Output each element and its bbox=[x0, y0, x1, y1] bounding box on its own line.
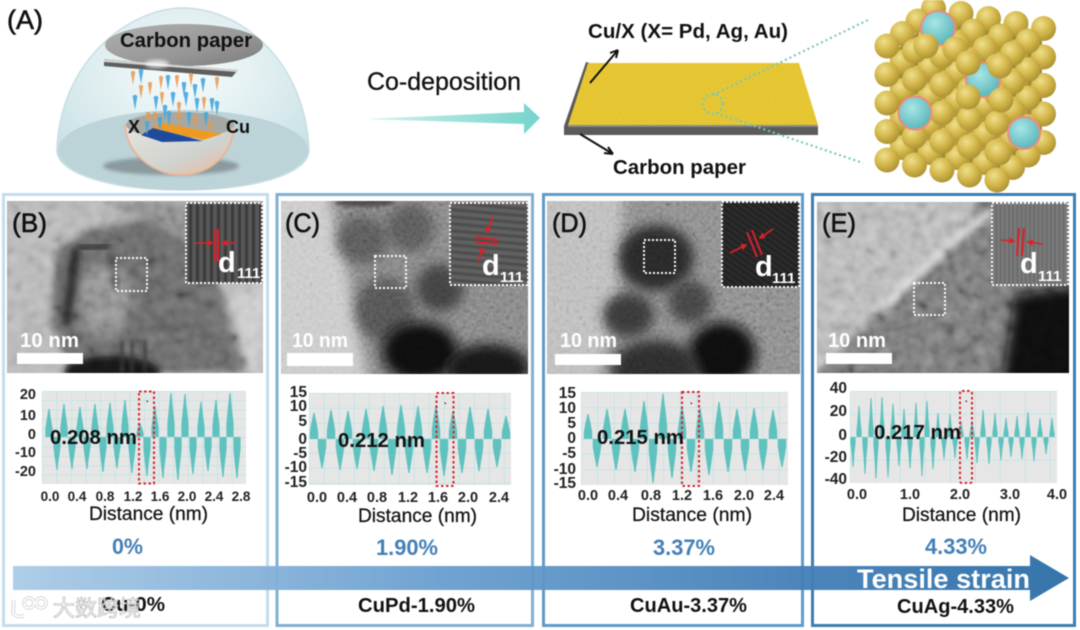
label: carbon paper: Carbon paper bbox=[613, 157, 746, 179]
line profile chart D: 0.0 bbox=[578, 488, 598, 504]
line profile chart C: 1.6 bbox=[428, 490, 448, 506]
icon: sputtering dome chamber bbox=[57, 8, 309, 190]
panel border bbox=[4, 194, 268, 626]
panel B: Cu bbox=[4, 194, 268, 626]
line profile chart D: 0.215 nm bbox=[597, 427, 684, 449]
scale bar C bbox=[287, 330, 353, 366]
icon: coated carbon paper sheet bbox=[564, 60, 821, 135]
inset E: lattice fringes: d bbox=[1020, 248, 1038, 280]
inset B: lattice fringes bbox=[186, 203, 262, 283]
line profile chart D: 0.4 bbox=[608, 488, 628, 504]
panel border bbox=[812, 194, 1074, 626]
line profile chart B: 10 bbox=[20, 408, 36, 424]
line profile chart D: -10 bbox=[554, 461, 576, 478]
inset B: lattice fringes: d bbox=[218, 247, 236, 279]
line profile chart C: 2.4 bbox=[489, 490, 509, 506]
arrow: to coating bbox=[590, 50, 618, 83]
line profile chart B: Distance (nm) bbox=[89, 504, 208, 525]
text: co-deposition: Co-deposition bbox=[367, 68, 521, 96]
panel label A: (A) bbox=[7, 5, 43, 35]
line profile chart D: -5 bbox=[562, 445, 576, 462]
line profile chart D: 1.6 bbox=[703, 488, 723, 504]
panel A: co-deposition schematic bbox=[7, 0, 1056, 192]
line profile chart C: 2.0 bbox=[458, 490, 478, 506]
line profile chart C: -5 bbox=[293, 445, 307, 462]
scale bar D: 10 nm bbox=[560, 330, 617, 352]
inset C: lattice fringes bbox=[450, 203, 528, 286]
line profile chart D: 0.8 bbox=[641, 488, 661, 504]
sample label E: CuAg-4.33% bbox=[897, 596, 1014, 618]
sample label B: Cu-0% bbox=[101, 594, 165, 616]
line profile chart B: 1.6 bbox=[151, 489, 170, 504]
panel border bbox=[544, 194, 802, 626]
line profile chart E: -40 bbox=[825, 471, 847, 488]
line profile chart E: 20 bbox=[830, 403, 847, 420]
line profile chart D: 1.2 bbox=[672, 488, 692, 504]
panel label C: (C) bbox=[285, 208, 320, 238]
scale bar B: 10 nm bbox=[20, 330, 79, 352]
strain value C: 1.90% bbox=[376, 535, 438, 560]
line profile chart C: 0.212 nm bbox=[338, 430, 425, 452]
inset B: lattice fringes: 111 bbox=[237, 265, 260, 282]
line profile chart E: 0 bbox=[838, 427, 847, 444]
line profile chart B: -20 bbox=[15, 464, 36, 480]
line profile chart E: 4.0 bbox=[1047, 487, 1067, 503]
line profile chart D: 2.0 bbox=[734, 488, 754, 504]
strain value E: 4.33% bbox=[925, 534, 987, 559]
selected region E bbox=[914, 283, 945, 315]
sample label D: CuAu-3.37% bbox=[630, 595, 747, 617]
inset D: lattice fringes: 111 bbox=[772, 270, 795, 287]
selected region D bbox=[644, 240, 675, 273]
line profile chart D bbox=[554, 385, 788, 526]
line profile chart C: 1.2 bbox=[398, 490, 418, 506]
line profile chart C: 15 bbox=[290, 384, 307, 401]
zoom callout: dotted lines bbox=[703, 19, 870, 163]
micrograph B bbox=[7, 201, 263, 388]
micrograph D bbox=[546, 200, 801, 375]
line profile chart E: 0.0 bbox=[847, 487, 867, 503]
inset E: lattice fringes: 111 bbox=[1038, 268, 1061, 285]
line profile chart B: 2.8 bbox=[232, 489, 251, 504]
inset C: lattice fringes: d bbox=[482, 250, 500, 282]
line profile chart B: 0.8 bbox=[96, 489, 115, 504]
line profile chart D: 15 bbox=[559, 385, 576, 402]
line profile chart B: 1.2 bbox=[124, 489, 142, 504]
selected region B bbox=[116, 258, 147, 291]
line profile chart B: 20 bbox=[20, 387, 36, 403]
line profile chart C: Distance (nm) bbox=[358, 506, 477, 527]
label: Cu/X composition: Cu/X (X= Pd, Ag, Au) bbox=[588, 21, 788, 43]
inset D: lattice fringes: d bbox=[755, 251, 773, 283]
label: tensile strain: Tensile strain bbox=[857, 564, 1030, 594]
line profile chart C: 0 bbox=[298, 431, 307, 448]
scale bar E bbox=[826, 330, 892, 364]
line profile chart C: 0.0 bbox=[307, 490, 327, 506]
line profile chart B: 0.4 bbox=[68, 489, 87, 504]
line profile chart B: 2.0 bbox=[178, 489, 196, 504]
arrow: co-deposition bbox=[365, 103, 540, 134]
line profile chart E: 1.0 bbox=[900, 487, 920, 503]
line profile chart E: 40 bbox=[830, 380, 847, 397]
line profile chart C bbox=[285, 384, 511, 527]
line profile chart E: -20 bbox=[825, 449, 847, 466]
line profile chart D: 5 bbox=[567, 415, 576, 432]
line profile chart C: -15 bbox=[285, 474, 307, 491]
dome label: Cu: Cu bbox=[226, 117, 250, 137]
line profile chart E: 2.0 bbox=[950, 487, 970, 503]
line profile chart D: -15 bbox=[554, 475, 576, 492]
line profile chart C: -10 bbox=[285, 459, 307, 476]
strain value D: 3.37% bbox=[653, 535, 715, 560]
scale bar B bbox=[17, 330, 83, 364]
micrograph C bbox=[280, 200, 529, 375]
selected region C bbox=[375, 256, 406, 288]
inset E: lattice fringes bbox=[992, 203, 1068, 285]
line profile chart D: 10 bbox=[559, 400, 576, 417]
dome label: X: X bbox=[128, 117, 140, 137]
icon: atomic cube model bbox=[874, 0, 1056, 192]
arrow: to carbon paper bbox=[580, 134, 613, 154]
scale bar C: 10 nm bbox=[292, 330, 348, 352]
inset D: lattice fringes bbox=[722, 202, 799, 287]
scale bar E: 10 nm bbox=[828, 330, 886, 352]
panel D: CuAu bbox=[541, 192, 805, 628]
watermark bbox=[13, 596, 141, 621]
panel label B: (B) bbox=[12, 208, 47, 238]
line profile chart C: 0.4 bbox=[337, 490, 357, 506]
line profile chart B: 0 bbox=[28, 427, 36, 443]
line profile chart B: 2.4 bbox=[205, 489, 224, 504]
line profile chart C: 10 bbox=[290, 398, 307, 415]
panel E: CuAg bbox=[810, 192, 1077, 628]
line profile chart B: 0.0 bbox=[41, 489, 59, 504]
line profile chart E: 3.0 bbox=[1000, 487, 1020, 503]
line profile chart C: 5 bbox=[298, 413, 307, 430]
inset C: lattice fringes: 111 bbox=[500, 269, 523, 286]
scale bar D bbox=[555, 330, 621, 365]
dome label: carbon paper: Carbon paper bbox=[120, 30, 252, 52]
line profile chart E: 0.217 nm bbox=[874, 422, 961, 444]
panel border bbox=[277, 194, 532, 626]
line profile chart B: -10 bbox=[15, 445, 36, 461]
panel C: CuPd bbox=[274, 192, 535, 628]
line profile chart B: 0.208 nm bbox=[50, 427, 137, 449]
watermark: 大数跨境 bbox=[53, 596, 141, 621]
line profile chart D: Distance (nm) bbox=[632, 505, 752, 526]
line profile chart D: 2.4 bbox=[764, 488, 784, 504]
line profile chart C: 0.8 bbox=[367, 490, 387, 506]
line profile chart B bbox=[15, 387, 251, 525]
line profile chart E: Distance (nm) bbox=[902, 505, 1021, 526]
panel label E: (E) bbox=[822, 208, 856, 238]
micrograph E bbox=[816, 201, 1070, 374]
panel label D: (D) bbox=[552, 208, 587, 238]
arrow: tensile strain bbox=[13, 555, 1069, 601]
line profile chart E bbox=[825, 380, 1067, 526]
strain value B: 0% bbox=[112, 534, 143, 559]
sample label C: CuPd-1.90% bbox=[358, 595, 475, 617]
line profile chart D: 0 bbox=[567, 430, 576, 447]
